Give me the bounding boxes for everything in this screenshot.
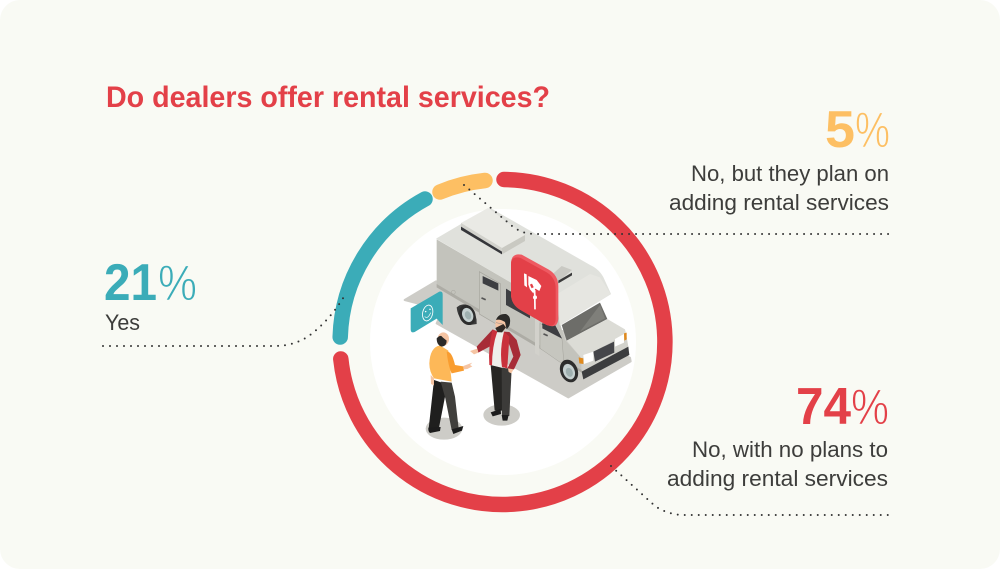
label: 5% description: adding rental services bbox=[669, 190, 889, 215]
roof vent bbox=[461, 208, 525, 254]
stat: 74%: % bbox=[851, 379, 889, 435]
stat: 74%: 74 bbox=[796, 378, 851, 436]
segment: 21% yes bbox=[340, 199, 425, 337]
stat: 5% bbox=[825, 101, 890, 159]
leader line: 74% bbox=[611, 466, 890, 515]
label: 74% description bbox=[667, 437, 888, 491]
illustration: camper van and two people bbox=[405, 208, 631, 440]
ground shadow bbox=[405, 281, 631, 397]
label: 5% description: No, but they plan on bbox=[691, 161, 889, 186]
stat: 74% bbox=[796, 378, 889, 436]
front wheel bbox=[557, 357, 581, 385]
stat: 5%: 5 bbox=[825, 101, 855, 159]
label: 74% description: No, with no plans to bbox=[692, 437, 888, 462]
van body bbox=[437, 208, 629, 379]
stat: 21% bbox=[104, 254, 197, 312]
label: 21% description: Yes bbox=[105, 310, 140, 335]
stat: 21%: % bbox=[158, 255, 197, 311]
stat: 5%: % bbox=[855, 102, 890, 158]
segment: 74% no plans bbox=[341, 180, 665, 504]
person: man in orange sweater bbox=[426, 332, 472, 440]
label: 5% description bbox=[669, 161, 889, 215]
icon: teal speech bubble with smiley bbox=[411, 291, 443, 332]
label: 74% description: adding rental services bbox=[667, 466, 888, 491]
icon: red badge with hand holding key bbox=[511, 254, 558, 326]
leader line: 21% bbox=[103, 295, 345, 346]
door and windows bbox=[479, 272, 501, 327]
title: Do dealers offer rental services? bbox=[106, 81, 550, 114]
illustration backdrop: white circle bbox=[370, 209, 636, 475]
segment: 5% planning bbox=[440, 180, 485, 192]
donut chart bbox=[340, 180, 665, 504]
stat: 21%: 21 bbox=[104, 254, 157, 312]
rear wheel bbox=[456, 302, 479, 328]
person: man in red jacket bbox=[470, 314, 521, 426]
leader line: 5% bbox=[464, 185, 890, 234]
